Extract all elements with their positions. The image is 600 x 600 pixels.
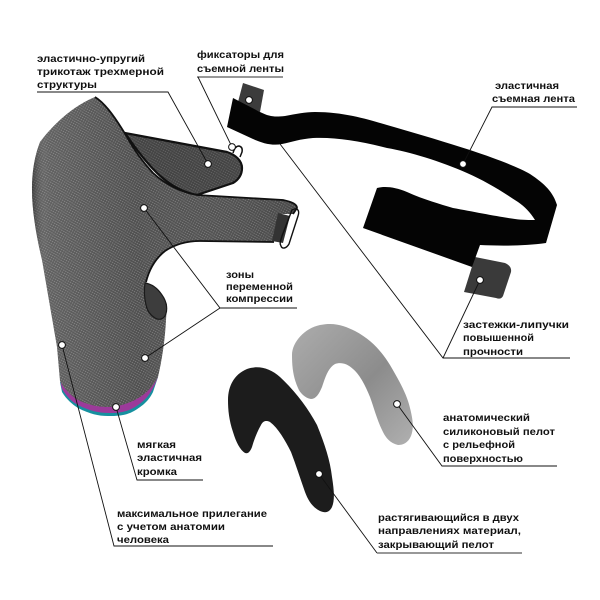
label: compression zones: компрессии: [226, 293, 293, 305]
label: stretch material: направлениях материал,: [378, 525, 521, 537]
label: velcro: застежки-липучки: [463, 319, 569, 331]
label: elastic strap: съемная лента: [492, 93, 575, 105]
label: silicone pad: [443, 412, 555, 465]
armpit notch: [144, 283, 167, 319]
illustration: silicone pad: [292, 324, 413, 445]
label: compression zones: [226, 269, 293, 305]
chest flap: [125, 133, 242, 195]
label: strap fixers: [197, 49, 284, 75]
bottom velcro tab: [464, 257, 511, 299]
leader lines: [37, 77, 577, 553]
label: stretch material: растягивающийся в двух: [378, 512, 519, 524]
illustration: cover fabric pad: [228, 367, 334, 512]
label: soft edge: эластичная: [137, 452, 202, 464]
label: compression zones: переменной: [226, 281, 293, 293]
callout markers: [59, 97, 483, 477]
sleeve shading: [32, 97, 297, 407]
top ring fastener: [233, 146, 242, 157]
label: strap fixers: фиксаторы для: [197, 49, 284, 61]
label: velcro: повышенной: [463, 332, 534, 344]
label: soft edge: кромка: [137, 466, 177, 478]
label: elastic strap: [492, 80, 575, 105]
label: silicone pad: с рельефной: [443, 439, 515, 451]
illustration: removable elastic strap: [227, 83, 557, 299]
label: stretch material: [378, 512, 521, 551]
sleeve border: [95, 97, 297, 282]
top velcro tab: [238, 83, 264, 112]
label: soft edge: [137, 439, 202, 478]
sleeve body: [32, 97, 297, 407]
label: velcro: прочности: [463, 346, 523, 358]
label: stretch material: закрывающий пелот: [378, 539, 494, 551]
label: knit fabric: эластично-упругий: [37, 53, 145, 65]
label: knit fabric: трикотаж трехмерной: [37, 66, 164, 78]
label: silicone pad: анатомический: [443, 412, 530, 424]
cuff: elastic edge: [60, 377, 158, 416]
label: maximum fit: человека: [117, 534, 169, 546]
side buckle: [272, 209, 299, 248]
strap band: [227, 98, 557, 267]
label: strap fixers: съемной ленты: [197, 63, 284, 75]
label: knit fabric: [37, 53, 164, 91]
label: silicone pad: силиконовый пелот: [443, 426, 555, 438]
label: maximum fit: с учетом анатомии: [117, 521, 225, 533]
illustration: shoulder brace: [32, 97, 299, 416]
label: silicone pad: поверхностью: [443, 453, 523, 465]
label: soft edge: мягкая: [137, 439, 176, 451]
label: velcro: [463, 319, 569, 358]
label: maximum fit: [117, 508, 267, 546]
label: compression zones: зоны: [226, 269, 254, 281]
label: knit fabric: структуры: [37, 79, 97, 91]
label: maximum fit: максимальное прилегание: [117, 508, 267, 520]
label: elastic strap: эластичная: [495, 80, 559, 92]
